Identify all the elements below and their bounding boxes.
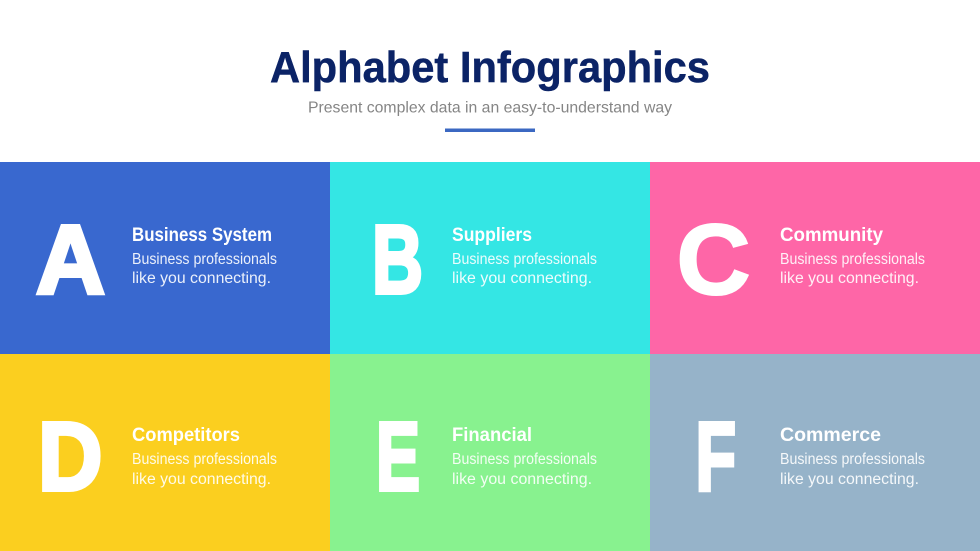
description F: Business professionals	[780, 451, 925, 468]
letter F: F	[696, 402, 736, 511]
panel: C Community	[650, 162, 980, 354]
letter E: E	[376, 402, 420, 511]
description C: Business professionals	[780, 251, 925, 268]
panel: F Commerce	[650, 354, 980, 551]
panel: B Suppliers	[330, 162, 650, 354]
heading: Commerce: Commerce	[780, 425, 881, 446]
description F: like you connecting.	[780, 471, 919, 488]
description D: Business professionals	[132, 451, 277, 468]
description B: like you connecting.	[452, 270, 592, 287]
header	[270, 43, 710, 132]
heading: Suppliers: Suppliers	[452, 225, 532, 246]
panel: A Business System	[0, 162, 330, 354]
panel: D Competitors	[0, 354, 330, 551]
panel: E Financial	[330, 354, 650, 551]
subtitle: Present complex data in an easy-to-understand way	[308, 100, 672, 116]
description A: like you connecting.	[132, 270, 271, 287]
description E: like you connecting.	[452, 471, 592, 488]
description C: like you connecting.	[780, 270, 919, 287]
letter D: D	[38, 402, 102, 511]
heading: Business System: Business System	[132, 225, 272, 246]
description E: Business professionals	[452, 451, 597, 468]
letter B: B	[372, 205, 423, 314]
heading: Financial: Financial	[452, 425, 532, 446]
title underline	[445, 128, 535, 132]
letter C: C	[676, 204, 750, 316]
description D: like you connecting.	[132, 471, 271, 488]
heading: Competitors: Competitors	[132, 425, 240, 446]
letter A: A	[36, 205, 105, 314]
description B: Business professionals	[452, 251, 597, 268]
heading: Community: Community	[780, 225, 883, 246]
title: Alphabet Infographics	[270, 43, 710, 92]
description A: Business professionals	[132, 251, 277, 268]
